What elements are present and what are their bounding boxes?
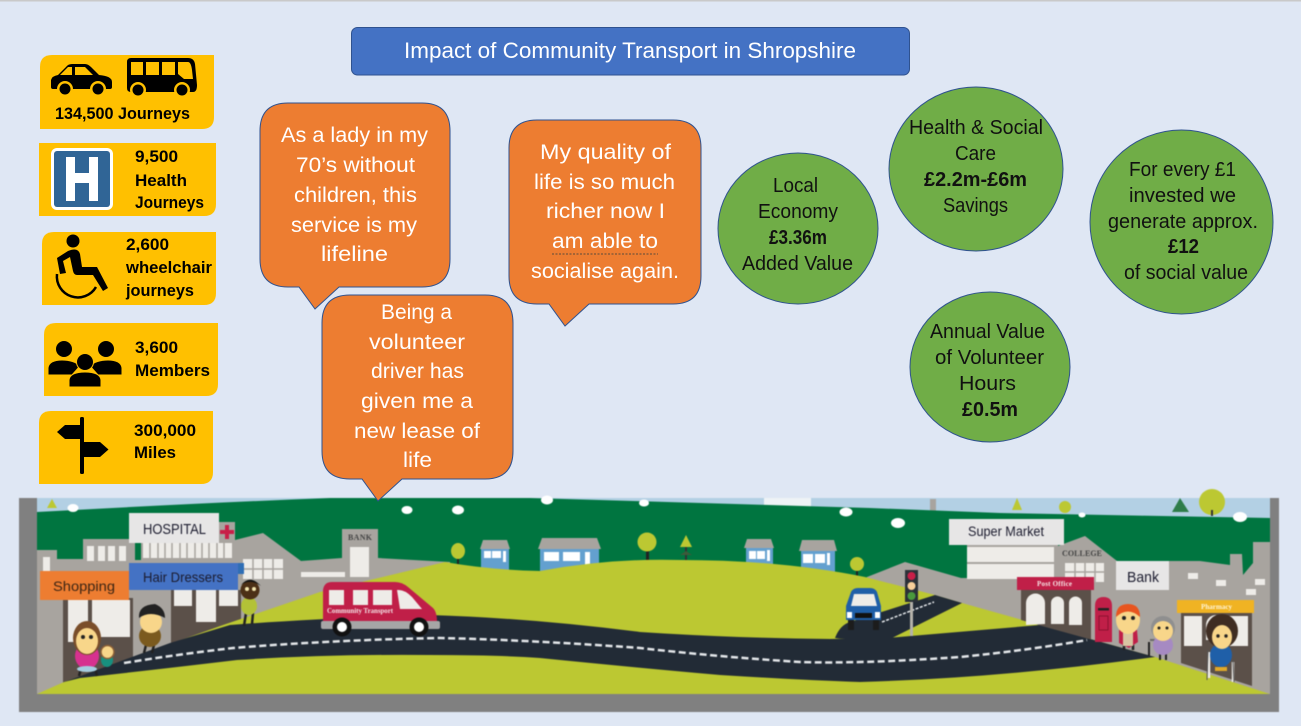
sheep [68, 496, 1247, 528]
icon: people group [48, 340, 122, 387]
label: health journeys [135, 147, 204, 212]
pharmacy: Pharmacy [1201, 603, 1232, 611]
circle: local economy: Local [773, 175, 818, 197]
circle: social value: generate approx. [1108, 211, 1258, 233]
label: miles [134, 421, 196, 462]
title [352, 28, 910, 75]
label: health journeys: 9,500 [135, 147, 178, 166]
quote bubble: volunteer driver: volunteer [369, 330, 465, 354]
label: shopping [40, 571, 129, 600]
circle: volunteer hours: Hours [959, 373, 1016, 395]
grey town buildings left [37, 522, 450, 694]
panel: key statistics [39, 55, 218, 484]
main road [64, 615, 1155, 682]
quote bubble: lifeline: 70’s without [296, 153, 415, 177]
circle: health and social care [889, 87, 1063, 251]
circle: health and social care: £2.2m-£6m [924, 169, 1027, 191]
circle: local economy: £3.36m [769, 227, 827, 249]
quote bubble: quality of life: life is so much [534, 170, 675, 194]
community transport van [321, 582, 440, 636]
person: elderly woman with cane [1149, 616, 1175, 660]
quote bubble: quality of life: socialise again. [531, 259, 679, 283]
quote bubble: quality of life: My quality of [540, 140, 671, 164]
pharmacy [1177, 600, 1254, 686]
label: bank [1116, 561, 1169, 590]
label: hair dressers [129, 563, 244, 590]
quote bubble: quality of life: am able to [552, 229, 658, 253]
label: hospital [129, 513, 219, 543]
label: wheelchair journeys: journeys [125, 281, 194, 300]
title: Impact of Community Transport in Shropshire [404, 38, 856, 63]
quote bubble: quality of life: richer now I [546, 199, 665, 223]
label: members: Members [135, 361, 210, 380]
lime green hills [37, 560, 1270, 694]
circle: social value: For every £1 [1129, 159, 1236, 181]
supermarket and college windows [967, 547, 1265, 595]
side road [835, 595, 962, 640]
circle: volunteer hours: of Volunteer [935, 347, 1044, 369]
icon: hospital cross [220, 525, 234, 539]
quote bubble: volunteer driver: life [403, 448, 432, 472]
circle: social value: of social value [1124, 262, 1248, 284]
quote bubble: volunteer driver: Being a [381, 300, 452, 324]
person: woman in wheelchair [1206, 614, 1238, 682]
sky [37, 498, 1270, 528]
quote bubble: volunteer driver: given me a [361, 389, 473, 413]
circle: health and social care: Savings [943, 195, 1008, 217]
quote bubble: lifeline: As a lady in my [281, 123, 428, 147]
label: journeys: 134,500 Journeys [55, 104, 190, 123]
post office [1017, 577, 1094, 640]
circle: local economy [718, 153, 878, 304]
label: wheelchair journeys: 2,600 [126, 235, 169, 254]
person: child [101, 646, 114, 667]
label: miles: Miles [134, 443, 176, 462]
houses [480, 538, 837, 575]
label: hair dressers: Hair Dressers [143, 569, 223, 585]
label: wheelchair journeys: wheelchair [125, 258, 212, 277]
community transport van: Community Transport [327, 607, 394, 615]
quote bubble: volunteer driver: driver has [371, 359, 464, 383]
circle: volunteer hours: Annual Value [930, 321, 1045, 343]
post office: Post Office [1037, 580, 1072, 588]
circle: local economy: Added Value [742, 253, 853, 275]
bank sign: BANK [348, 533, 373, 542]
blue car [846, 588, 881, 630]
icon: car [51, 64, 112, 97]
label: super market [949, 519, 1064, 545]
label: hospital: HOSPITAL [143, 521, 206, 538]
circle: health and social care: Care [955, 143, 996, 165]
trees [451, 532, 864, 577]
circle: local economy: Economy [758, 201, 838, 223]
quote bubble: quality of life [509, 120, 701, 326]
label: members [135, 338, 210, 380]
circle: social value: invested we [1129, 185, 1236, 207]
circle: volunteer hours [910, 292, 1070, 442]
circle: social value: £12 [1168, 236, 1199, 258]
illustrated street scene [19, 489, 1279, 712]
shop fronts left [63, 590, 241, 688]
label: super market: Super Market [968, 524, 1044, 539]
stat: health journeys [39, 143, 216, 216]
person: red-haired man [1116, 604, 1140, 650]
label: health journeys: Health [135, 171, 187, 190]
building windows left [43, 543, 369, 579]
label: health journeys: Journeys [135, 193, 204, 212]
people left [73, 580, 261, 676]
quote bubble: lifeline [260, 103, 450, 309]
circle: health and social care: Health & Social [909, 117, 1043, 139]
person: man in brown [139, 604, 165, 653]
icon: wheelchair [57, 234, 108, 297]
person: woman with pink jacket [73, 621, 101, 676]
quote bubble: lifeline: service is my [291, 213, 417, 237]
traffic light [905, 570, 918, 636]
person: dark-skinned man [240, 580, 261, 626]
grey town buildings right [850, 536, 1270, 694]
icon: signpost [57, 417, 108, 474]
supermarket and college windows: COLLEGE [1062, 549, 1102, 558]
label: members: 3,600 [135, 338, 178, 357]
road centre dashes [124, 638, 1087, 663]
icon: bus [127, 58, 197, 98]
stat: miles [39, 411, 213, 484]
green hillside [37, 498, 1270, 620]
stat: journeys [40, 55, 214, 129]
quote bubble: volunteer driver [322, 295, 513, 501]
label: shopping: Shopping [53, 578, 115, 594]
circle: volunteer hours: £0.5m [962, 399, 1018, 421]
people right [1116, 604, 1238, 682]
post box [1095, 597, 1112, 642]
quote bubble: volunteer driver: new lease of [354, 419, 480, 443]
stat: wheelchair journeys [42, 232, 216, 305]
circle: social value [1090, 130, 1273, 314]
quote bubble: lifeline: children, this [294, 183, 417, 207]
quote bubble: lifeline: lifeline [321, 242, 388, 266]
distant scenery [47, 489, 1225, 516]
label: miles: 300,000 [134, 421, 196, 440]
label: wheelchair journeys [125, 235, 212, 300]
icon: hospital sign [51, 148, 113, 210]
label: bank: Bank [1127, 569, 1159, 586]
stat: members [44, 323, 218, 396]
